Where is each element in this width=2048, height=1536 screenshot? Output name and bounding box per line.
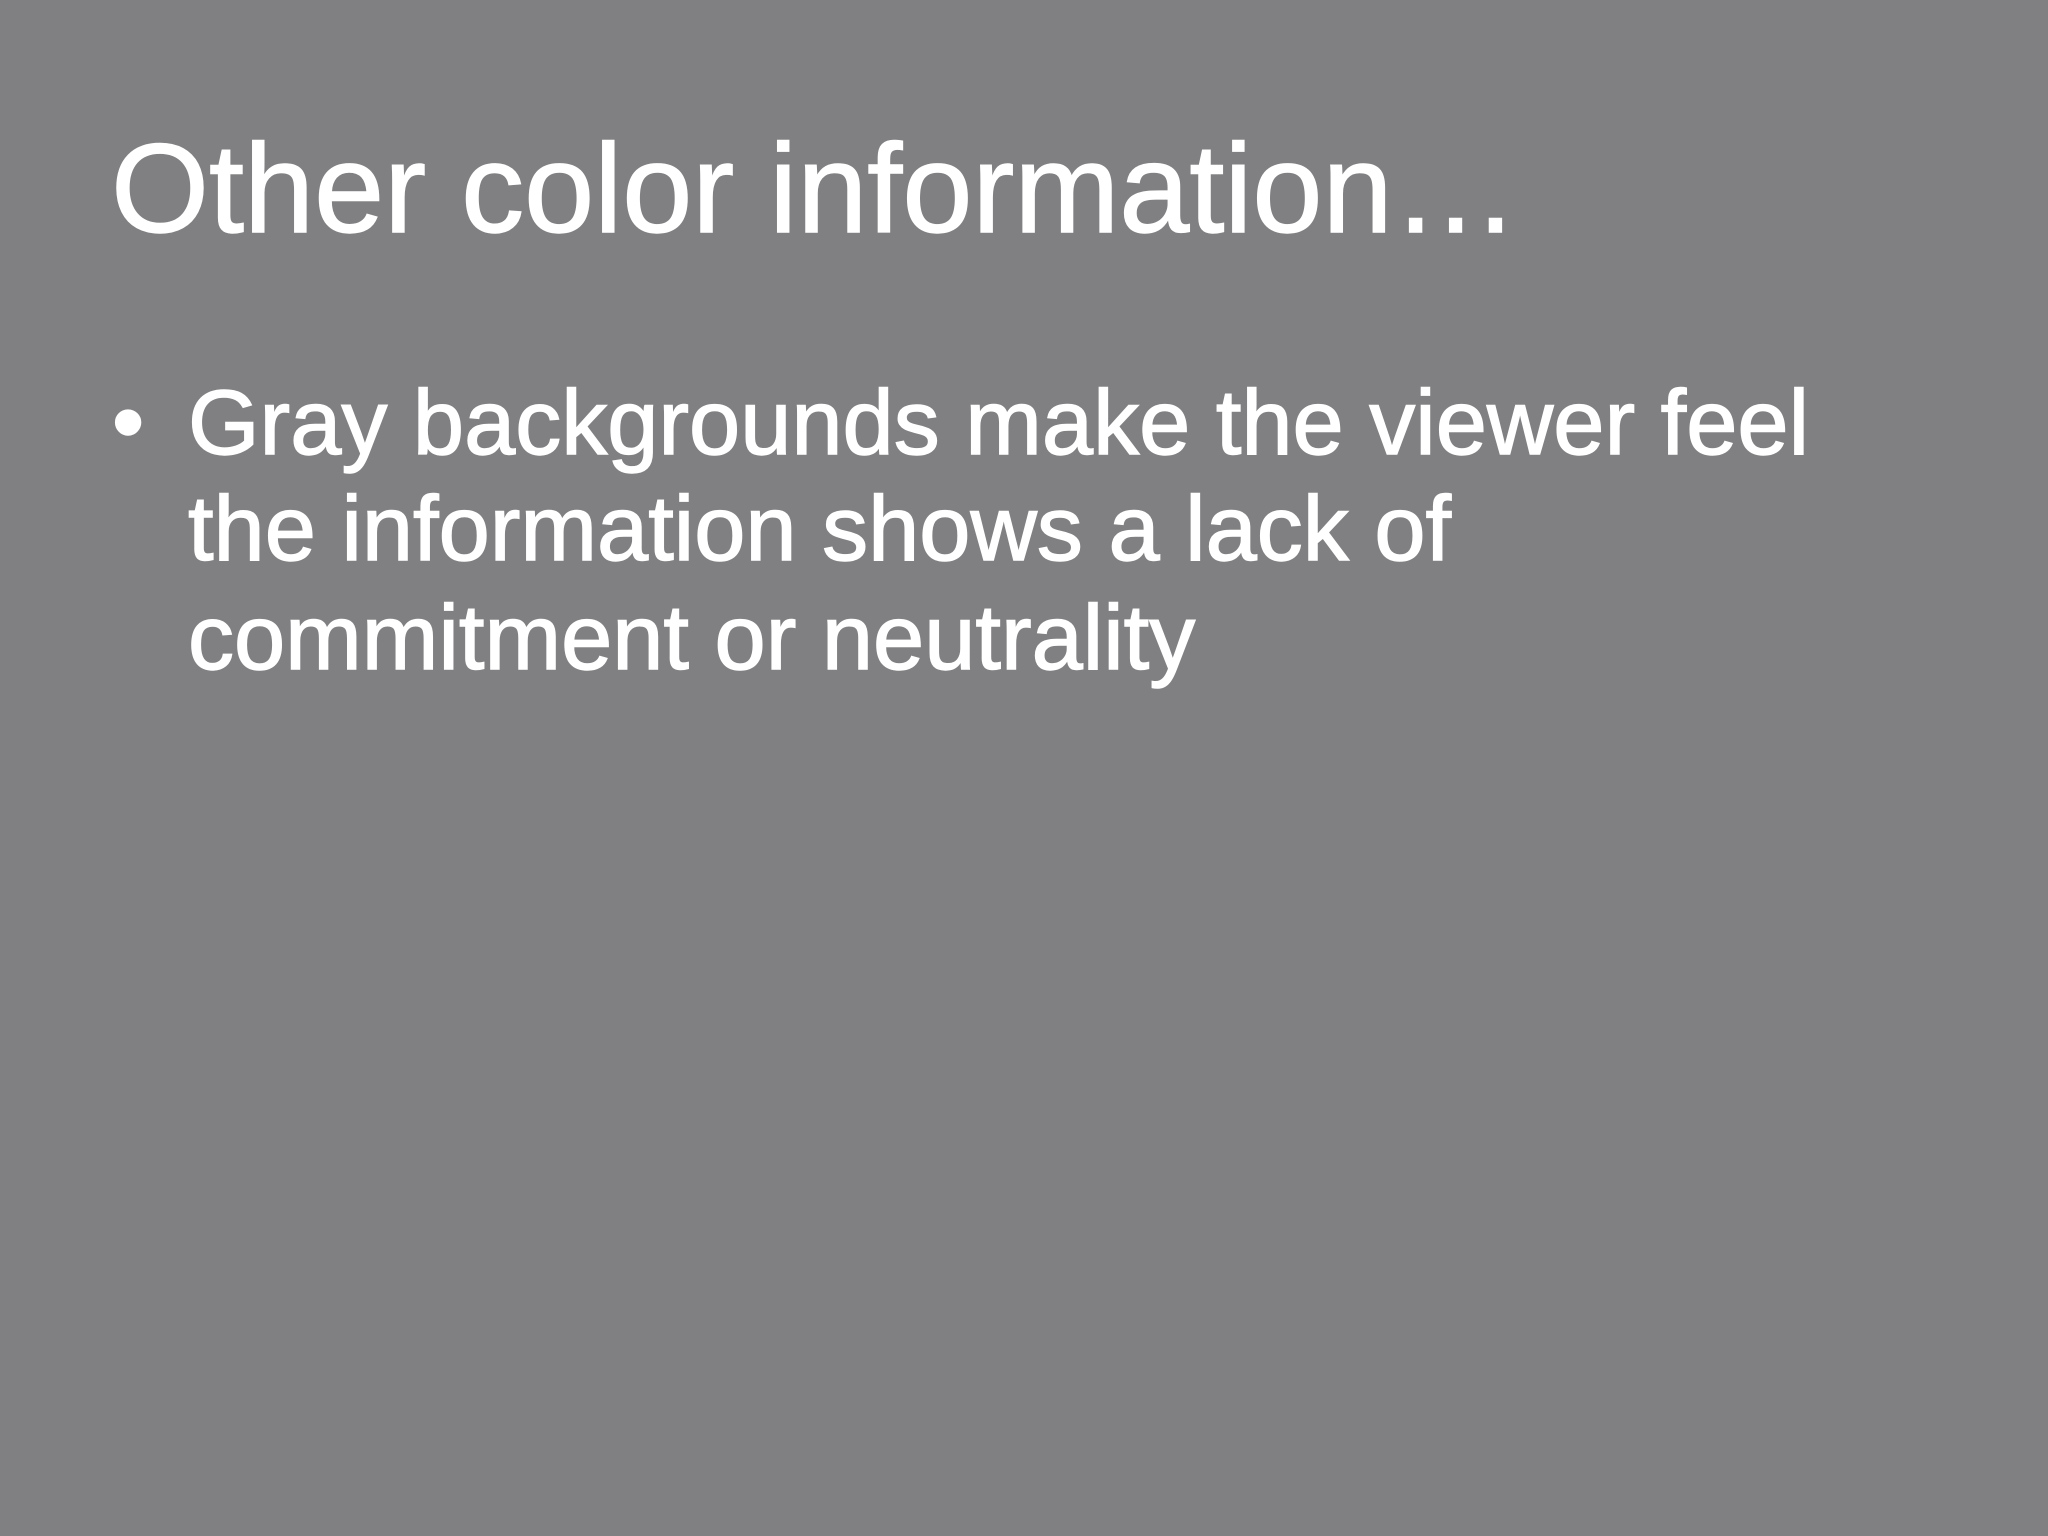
bullet text: Gray backgrounds make the viewer feel <box>188 372 1809 474</box>
bullet text: the information shows a lack of <box>188 478 1452 580</box>
bullet marker: • <box>112 371 144 473</box>
bullet point text block <box>112 371 1835 689</box>
bullet text: commitment or neutrality <box>188 587 1195 689</box>
title: Other color information… <box>111 118 1519 259</box>
